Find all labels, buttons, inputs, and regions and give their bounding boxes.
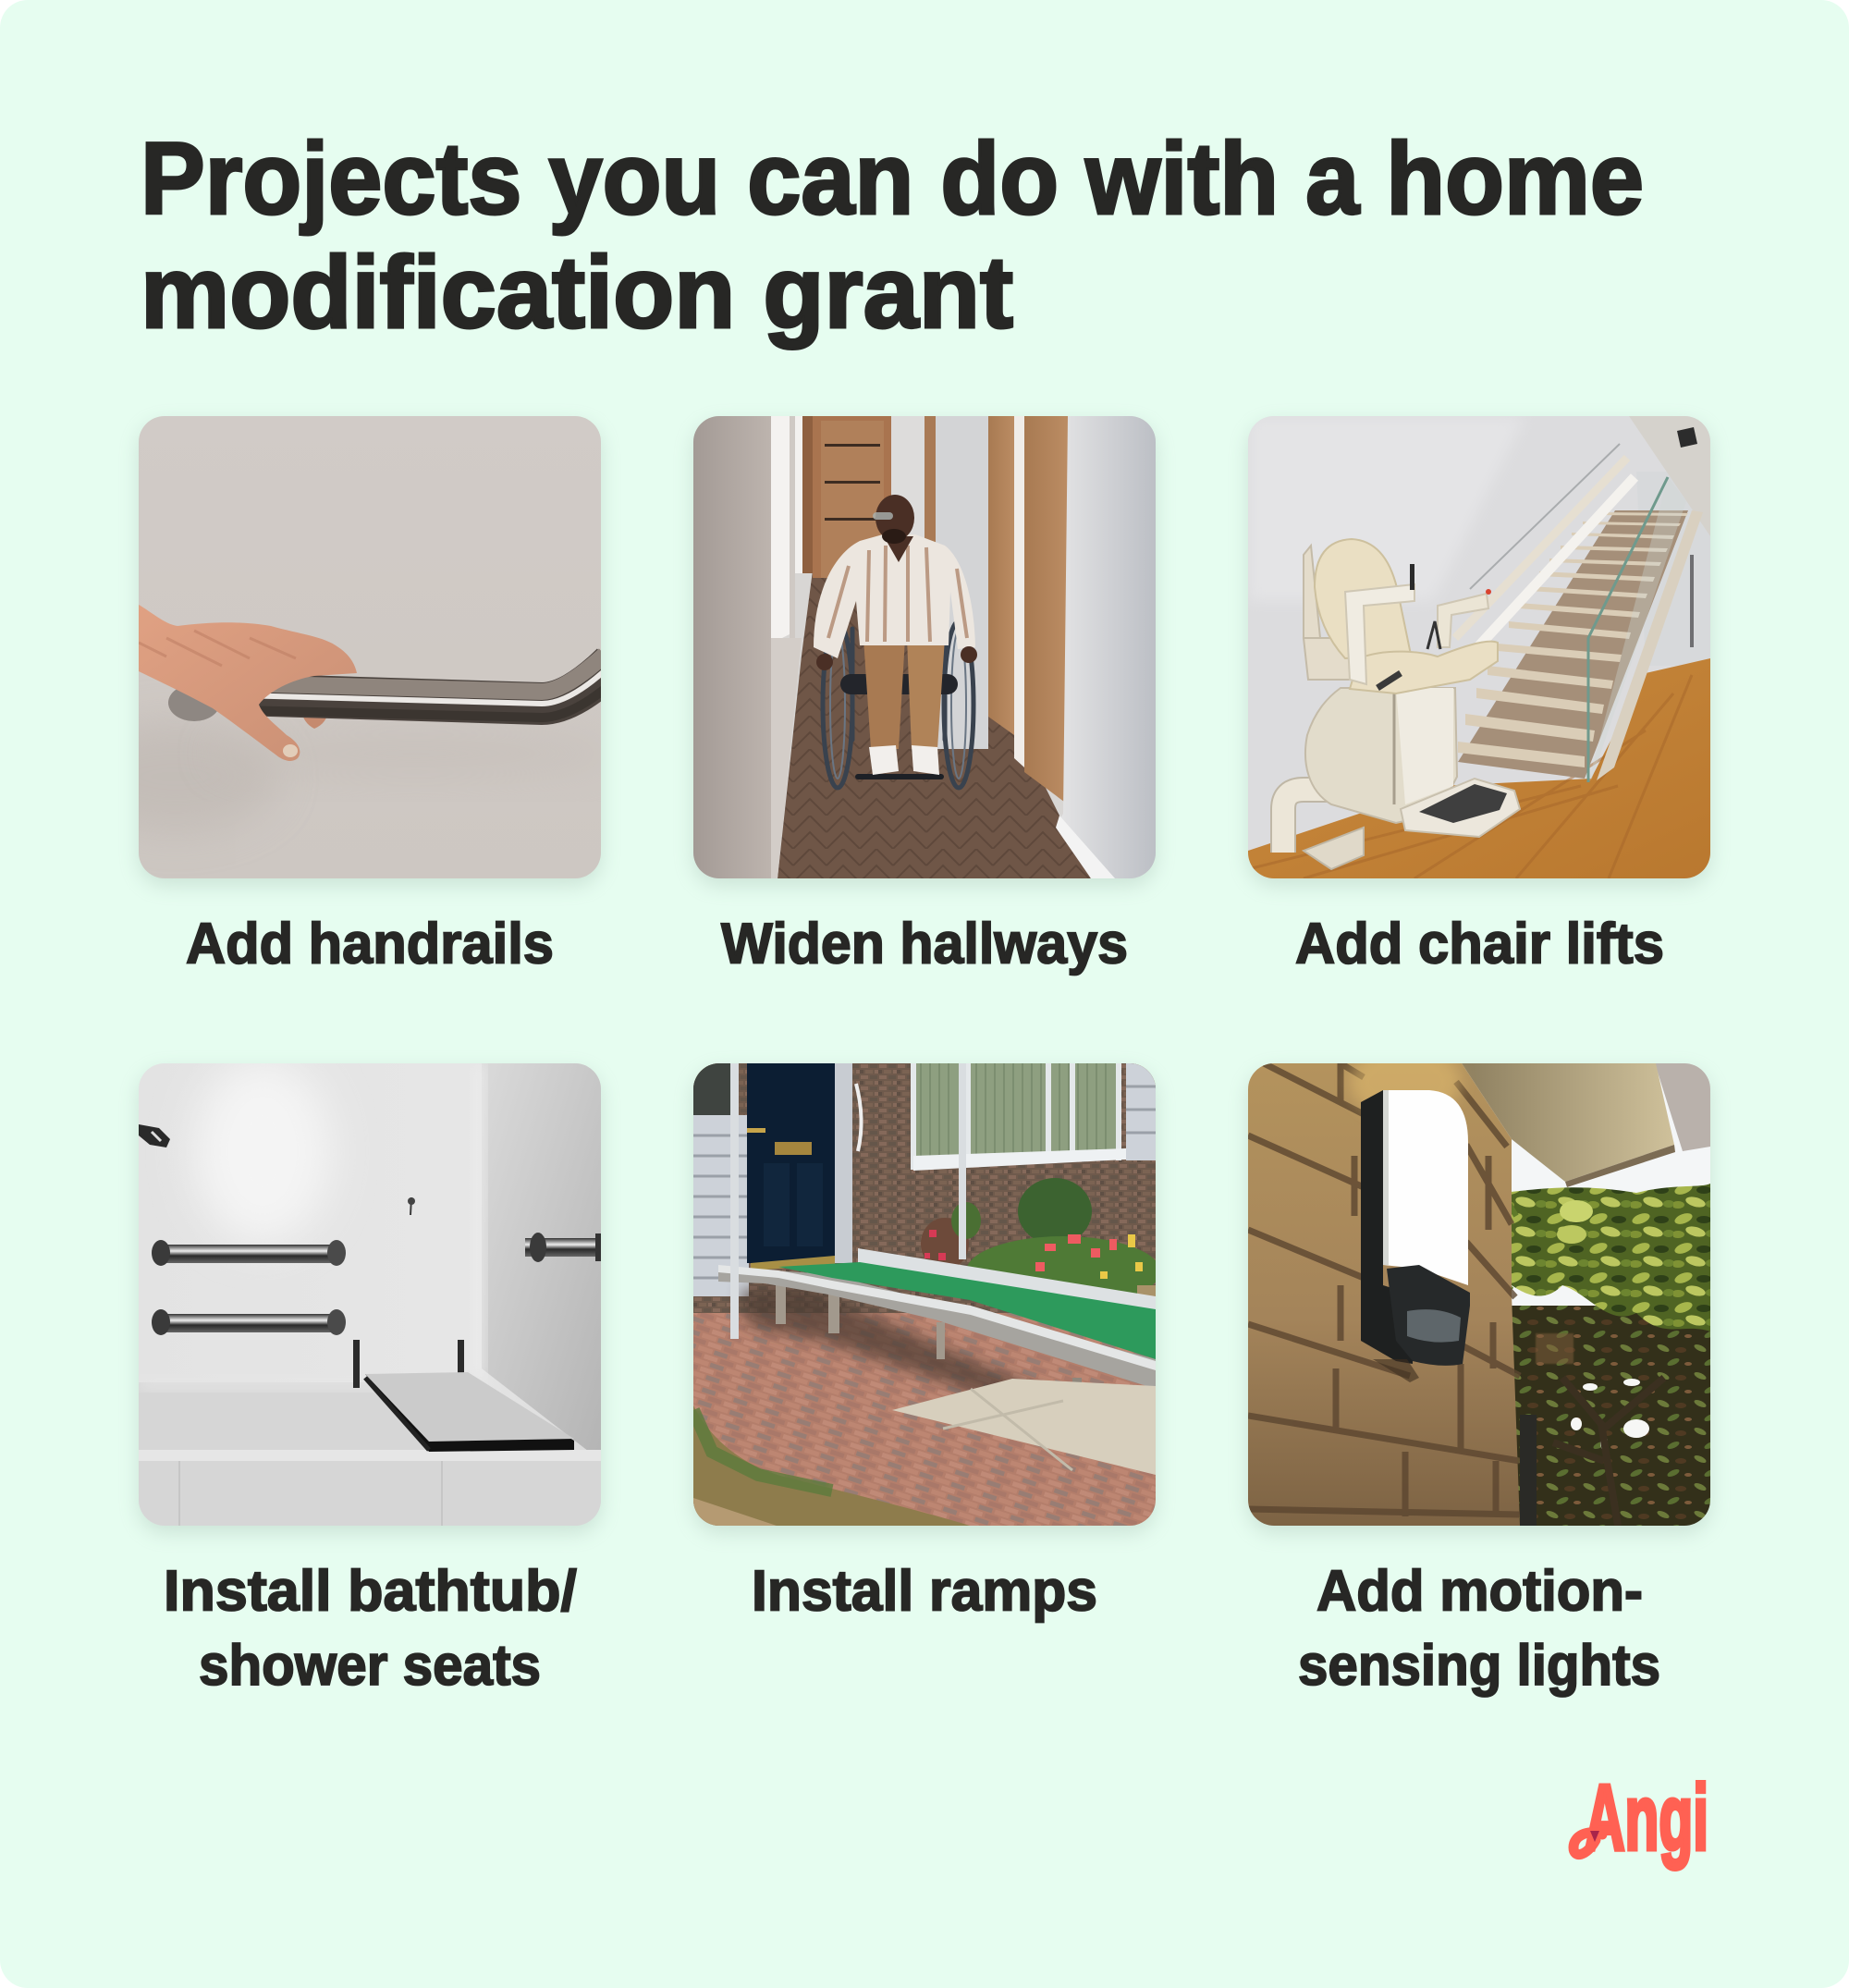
bright leaves — [1502, 1184, 1710, 1331]
legs — [863, 638, 905, 749]
label: add motion-sensing lights: Add motion- — [1316, 1559, 1643, 1624]
panel: widen hallways — [693, 416, 1156, 976]
label: add motion-sensing lights — [1298, 1559, 1660, 1698]
label: add chair lifts: Add chair lifts — [1295, 912, 1664, 976]
shadow under ramp — [740, 1285, 1091, 1410]
panel: add chair lifts — [1248, 416, 1710, 976]
photo: stair chair lift — [1248, 416, 1710, 878]
title — [141, 122, 1644, 350]
window — [913, 1063, 1119, 1156]
shell — [1305, 688, 1457, 823]
shirt — [814, 534, 975, 658]
title: Projects you can do with a home — [141, 122, 1644, 236]
label: add motion-sensing lights: sensing lights — [1298, 1634, 1660, 1698]
door — [747, 1063, 835, 1263]
pipe — [1304, 828, 1364, 869]
photo: man in wheelchair in hallway — [693, 416, 1156, 878]
wall — [693, 1063, 1156, 1313]
logo: Angi — [1573, 1766, 1708, 1870]
slab — [892, 1379, 1156, 1475]
siding — [693, 1115, 749, 1296]
footrest — [1401, 779, 1520, 837]
wall rails — [1470, 444, 1620, 589]
plants — [921, 1178, 1156, 1294]
head — [876, 495, 914, 536]
soffit — [1462, 1063, 1674, 1182]
seat — [1302, 544, 1350, 681]
panel: add handrails — [134, 416, 606, 965]
fixture — [1361, 1090, 1413, 1364]
glass panel — [1590, 510, 1683, 780]
label: install ramps: Install ramps — [752, 1559, 1097, 1624]
grab bars — [152, 1233, 601, 1335]
seat — [353, 1340, 360, 1388]
panel: add motion-sensing lights — [1248, 1045, 1710, 1698]
photo: access ramp at front door — [693, 1063, 1160, 1526]
brick wall — [1248, 1063, 1520, 1526]
tree top-right — [1655, 1063, 1710, 1151]
verge — [693, 1405, 970, 1526]
label: install bathtub/shower seats: Install bathtub/ — [164, 1559, 577, 1624]
posts — [730, 1063, 739, 1339]
label: add handrails: Add handrails — [186, 912, 554, 976]
photo: motion-sensing wall light — [1248, 1045, 1710, 1526]
ramp legs — [776, 1285, 786, 1324]
stairs — [1458, 510, 1688, 779]
label: install bathtub/shower seats — [164, 1559, 577, 1698]
logo: Angi: Angi — [1585, 1766, 1708, 1870]
photo: bathtub seat and grab bars — [139, 1059, 601, 1526]
panel: install ramps — [693, 1063, 1160, 1624]
title: modification grant — [141, 236, 1013, 350]
wheelchair — [823, 621, 973, 788]
ramp side — [718, 1267, 1156, 1389]
label: install bathtub/shower seats: shower seats — [199, 1634, 541, 1698]
ramp surface — [778, 1262, 1156, 1359]
label: widen hallways: Widen hallways — [721, 912, 1128, 976]
panel: install bathtub/shower seats — [139, 1059, 601, 1698]
foliage and shade — [1512, 1306, 1710, 1526]
ramp curb — [858, 1248, 1156, 1315]
photo: hand on handrail — [139, 416, 601, 878]
